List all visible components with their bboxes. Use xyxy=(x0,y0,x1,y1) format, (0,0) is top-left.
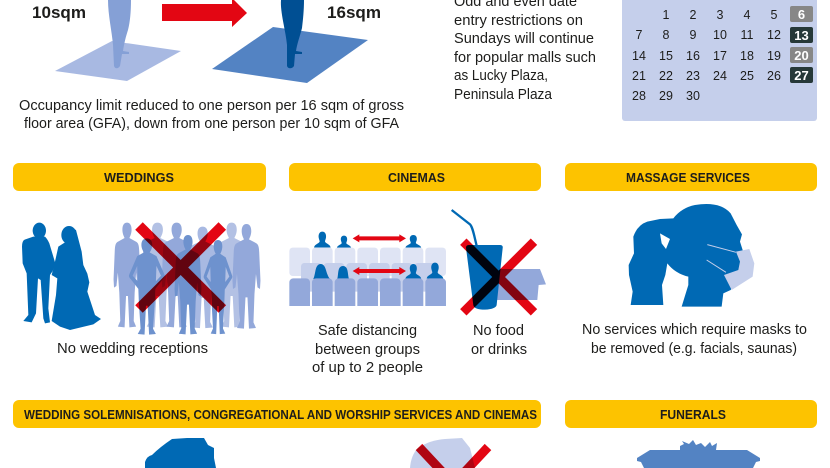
panel: calendar: 20 xyxy=(794,48,809,63)
icon: cinema seats with safe distancing xyxy=(289,232,446,306)
panel: calendar xyxy=(622,0,817,121)
text: odd and even date entry restrictions: Sundays will continue xyxy=(454,31,594,47)
heading: massage services xyxy=(565,163,817,191)
text: safe distancing caption xyxy=(312,323,423,376)
heading: cinemas xyxy=(289,163,541,191)
panel: calendar: 17 xyxy=(713,49,727,63)
icon: person on 10 sqm floor area xyxy=(55,0,181,81)
panel: calendar: 18 xyxy=(740,49,754,63)
panel: calendar: 13 xyxy=(794,28,809,43)
panel: calendar: 29 xyxy=(659,89,673,103)
text: no services caption xyxy=(582,322,807,357)
text: safe distancing caption: Safe distancing xyxy=(318,323,417,339)
text: occupancy limit caption xyxy=(19,98,404,132)
heading: weddings xyxy=(13,163,266,191)
panel: calendar: 25 xyxy=(740,69,754,83)
label: 10sqm: 10sqm xyxy=(32,3,86,22)
panel: calendar: 7 xyxy=(636,28,643,42)
panel: calendar: 21 xyxy=(632,69,646,83)
panel: calendar: 9 xyxy=(690,28,697,42)
panel: calendar: 4 xyxy=(744,8,751,22)
panel: calendar: 11 xyxy=(741,28,754,42)
text: no food or drinks: or drinks xyxy=(471,342,527,358)
heading: cinemas: CINEMAS xyxy=(388,170,445,185)
panel: calendar: 1 xyxy=(663,8,670,22)
heading: wedding solemnisations and services: WEDDING SOLEMNISATIONS, CONGREGATIONAL AND WORSHIP SERVICES AND CINEMAS xyxy=(24,407,537,422)
heading: funerals: FUNERALS xyxy=(660,407,726,422)
text: odd and even date entry restrictions: Peninsula Plaza xyxy=(454,87,553,103)
arrow: reduction from 10sqm to 16sqm xyxy=(162,0,247,27)
panel: calendar: 10 xyxy=(713,28,727,42)
arrow: lower row distance xyxy=(353,267,406,275)
panel: calendar: 23 xyxy=(686,69,700,83)
heading: weddings: WEDDINGS xyxy=(104,170,174,185)
panel: calendar: 14 xyxy=(632,49,646,63)
panel: calendar: 6 xyxy=(798,7,805,22)
icon: crossed-out crowd of wedding guests xyxy=(114,223,260,335)
heading: wedding solemnisations and services xyxy=(13,400,541,428)
icon: coffin with flowers xyxy=(637,440,760,468)
icon: crossed-out head silhouette xyxy=(410,438,488,468)
panel: calendar: 12 xyxy=(767,28,781,42)
panel: calendar: 27 xyxy=(794,68,809,83)
text: safe distancing caption: between groups xyxy=(315,342,420,358)
panel: calendar: 24 xyxy=(713,69,727,83)
icon: crossed-out food and drink xyxy=(452,210,546,312)
text: occupancy limit caption: Occupancy limit reduced to one person per 16 sqm of gross xyxy=(19,98,404,114)
arrow: upper row distance xyxy=(353,234,406,242)
text: no services caption: be removed (e.g. facials, saunas) xyxy=(591,341,797,357)
text: safe distancing caption: of up to 2 people xyxy=(312,360,423,376)
text: no food or drinks: No food xyxy=(473,323,524,339)
panel: calendar: 30 xyxy=(686,89,700,103)
icon: person on 16 sqm floor area xyxy=(212,0,368,83)
panel: calendar: 3 xyxy=(717,8,724,22)
text: odd and even date entry restrictions xyxy=(454,0,596,103)
icon: woman with mask xyxy=(629,204,754,307)
panel: calendar: 15 xyxy=(659,49,673,63)
text: no wedding receptions: No wedding receptions xyxy=(57,341,208,357)
text: odd and even date entry restrictions: for popular malls such xyxy=(454,50,596,66)
panel: calendar: 16 xyxy=(686,49,700,63)
icon: red cross over crowd xyxy=(139,226,222,309)
heading: massage services: MASSAGE SERVICES xyxy=(626,170,750,185)
label: 16sqm: 16sqm xyxy=(327,3,381,22)
heading: funerals xyxy=(565,400,817,428)
panel: calendar: 26 xyxy=(767,69,781,83)
panel: calendar: 28 xyxy=(632,89,646,103)
panel: calendar: 2 xyxy=(690,8,697,22)
panel: calendar: 5 xyxy=(771,8,778,22)
text: no services caption: No services which require masks to xyxy=(582,322,807,338)
panel: calendar: 8 xyxy=(663,28,670,42)
panel: calendar: 19 xyxy=(767,49,781,63)
text: odd and even date entry restrictions: entry restrictions on xyxy=(454,13,583,29)
icon: singer head silhouette xyxy=(145,438,216,468)
panel: calendar: 22 xyxy=(659,69,673,83)
text: no food or drinks xyxy=(471,323,527,358)
icon: bride and groom xyxy=(22,223,101,330)
text: odd and even date entry restrictions: as Lucky Plaza, xyxy=(454,68,548,84)
text: occupancy limit caption: floor area (GFA), down from one person per 10 sqm of GFA xyxy=(24,116,399,132)
